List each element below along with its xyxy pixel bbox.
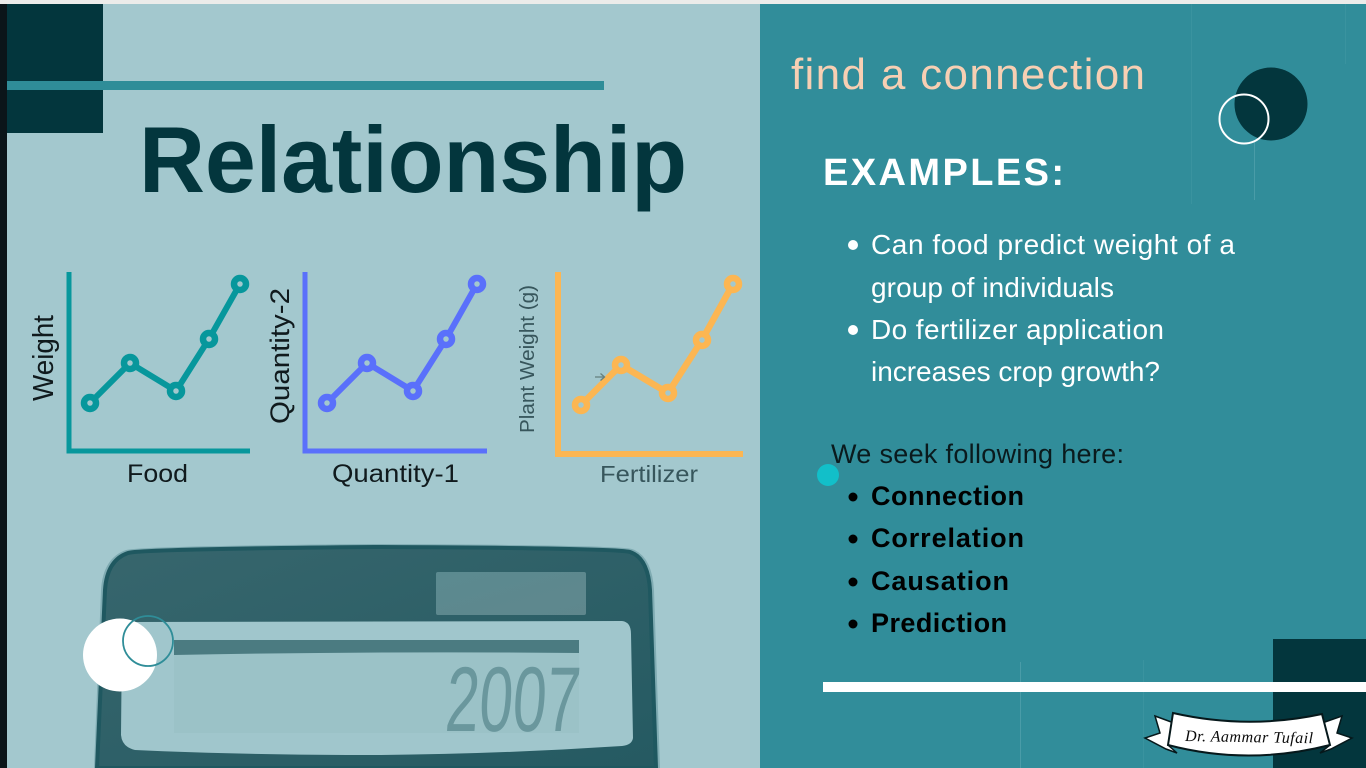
solar panel — [436, 572, 586, 615]
list of goals: Connection — [871, 481, 1024, 511]
icon: mouse cursor arrow — [595, 374, 604, 380]
chart: quantity-2 vs quantity-1 — [265, 272, 487, 488]
panel: right — [760, 4, 1366, 768]
teal header bar — [7, 81, 604, 90]
chart: quantity-2 vs quantity-1: Quantity-1 — [332, 460, 459, 488]
list of goals — [848, 481, 1024, 638]
examples list — [848, 229, 1235, 387]
display frame — [121, 621, 633, 755]
ribbon banner with author name: Dr. Aammar Tufail — [1184, 728, 1314, 747]
list of goals: Prediction — [871, 608, 1007, 638]
LCD reading: 2007 — [443, 648, 584, 751]
icon: overlapping circles — [1220, 68, 1308, 144]
dark corner square — [7, 4, 103, 133]
chart: weight vs food — [28, 272, 250, 488]
calculator photo — [94, 544, 660, 768]
ribbon banner with author name — [1145, 713, 1352, 756]
list of goals: Correlation — [871, 523, 1024, 553]
chart: plant weight vs fertilizer: Plant Weight (g) — [517, 285, 539, 433]
examples list: Can food predict weight of a — [871, 229, 1235, 260]
text: we seek following here: We seek following here: — [831, 439, 1124, 469]
chart: plant weight vs fertilizer: Fertilizer — [600, 461, 698, 487]
heading: find a connection: find a connection — [791, 50, 1145, 99]
icon: cyan dot — [817, 464, 839, 486]
dark corner square — [1273, 639, 1366, 768]
examples list: Do fertilizer application — [871, 314, 1164, 345]
chart: plant weight vs fertilizer — [517, 272, 743, 487]
chart: weight vs food: Weight — [28, 315, 60, 401]
chart: quantity-2 vs quantity-1: Quantity-2 — [265, 288, 295, 424]
title: Relationship — [139, 107, 687, 212]
heading: examples: EXAMPLES: — [823, 152, 1064, 194]
chart: weight vs food: Food — [127, 460, 188, 488]
examples list: group of individuals — [871, 272, 1114, 303]
LCD screen — [174, 640, 579, 733]
list of goals: Causation — [871, 566, 1009, 596]
white circle with teal ring — [83, 616, 173, 692]
white footer bar — [823, 682, 1366, 692]
examples list: increases crop growth? — [871, 356, 1160, 387]
